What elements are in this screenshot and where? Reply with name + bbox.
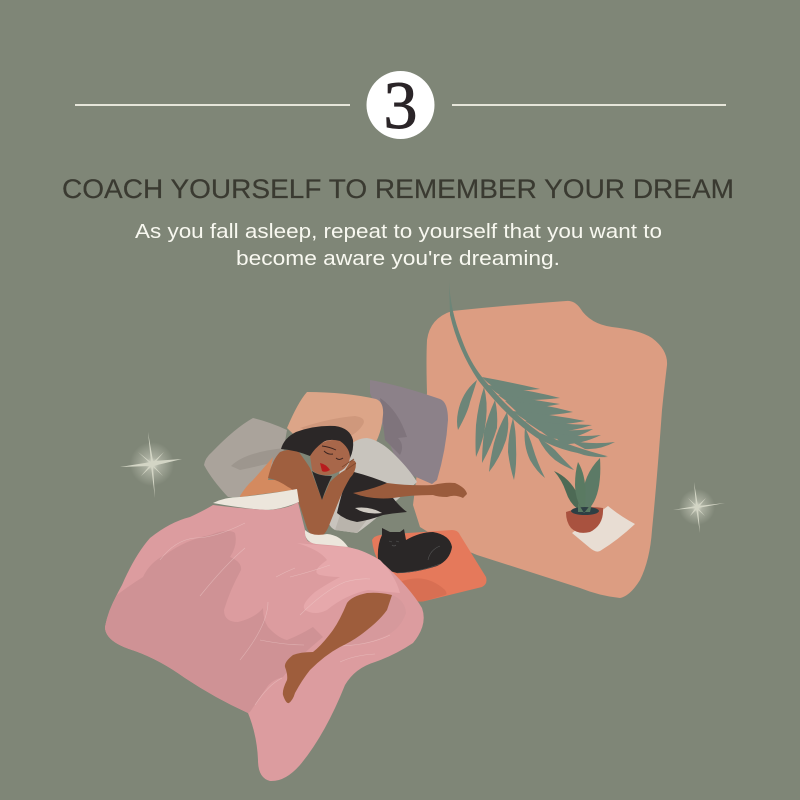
grey pillow left (204, 418, 287, 497)
peach pillow (287, 392, 383, 460)
hair highlight (355, 508, 382, 513)
translucent right fold (345, 595, 406, 646)
eyes and lips (322, 446, 343, 460)
step number divider: 3 (384, 67, 418, 143)
sparkle right (673, 482, 725, 533)
sheet tuck (305, 530, 348, 547)
lower-left fold shade (105, 531, 323, 713)
body text: become aware you're dreaming. (236, 248, 560, 270)
leg (283, 593, 392, 703)
fingers (342, 459, 356, 470)
light pillow right (328, 438, 417, 533)
orange cushion (372, 530, 486, 602)
hair over head (281, 426, 353, 458)
sheet edge (213, 489, 299, 510)
hair behind neck (312, 471, 332, 500)
wall shape (413, 301, 667, 598)
upper-right light drape (297, 543, 400, 613)
blanket wrinkles (160, 523, 390, 705)
camisole (240, 457, 293, 497)
purple pillow (370, 380, 448, 484)
palm frond (449, 280, 615, 480)
cat (378, 528, 452, 573)
sparkle left (120, 432, 182, 498)
heading: COACH YOURSELF TO REMEMBER YOUR DREAM (62, 174, 734, 204)
body text: As you fall asleep, repeat to yourself that you want to (135, 221, 662, 243)
potted plant on cloth (554, 458, 635, 552)
shoulder and arm (268, 450, 356, 537)
woman sleeping (240, 426, 467, 537)
face (310, 440, 352, 475)
extended arm (353, 483, 467, 498)
body text (135, 221, 662, 270)
step number divider (75, 67, 726, 143)
blanket (105, 502, 424, 781)
flowing hair (337, 470, 407, 522)
